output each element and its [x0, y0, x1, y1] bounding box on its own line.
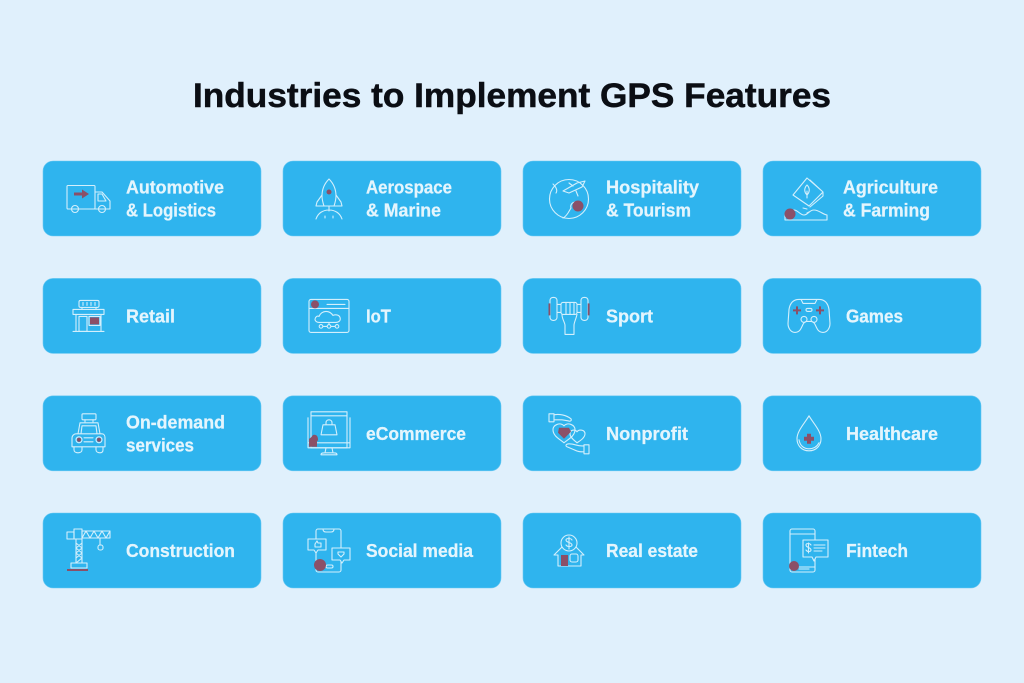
panel: Real estate — [523, 513, 741, 588]
panel: On-demand services — [43, 396, 261, 471]
panel: Aerospace & Marine — [283, 161, 501, 236]
panel: Automotive & Logistics — [43, 161, 261, 236]
icon: hand lifting dumbbell — [548, 297, 590, 334]
label: Agriculture — [843, 178, 938, 198]
label: Healthcare — [846, 424, 938, 444]
label: Retail — [126, 306, 175, 326]
panel: Social media — [283, 513, 501, 588]
label: Construction — [126, 541, 235, 561]
label — [843, 178, 938, 220]
label — [606, 178, 699, 220]
icon: house with coin — [554, 535, 584, 566]
label: On-demand — [126, 412, 225, 432]
label: IoT — [366, 306, 391, 326]
panel: Hospitality & Tourism — [523, 161, 741, 236]
label: Social media — [366, 541, 474, 561]
panel: Construction — [43, 513, 261, 588]
icon: delivery truck — [67, 186, 110, 212]
panel: Nonprofit — [523, 396, 741, 471]
panel: Sport — [523, 278, 741, 353]
title: Industries to Implement GPS Features — [193, 77, 831, 115]
label: & Logistics — [126, 200, 216, 220]
panel: Retail — [43, 278, 261, 353]
panel: IoT — [283, 278, 501, 353]
label: eCommerce — [366, 424, 466, 444]
label: services — [126, 435, 194, 455]
icon: phone with payment message — [789, 529, 828, 572]
label: Hospitality — [606, 178, 699, 198]
label — [126, 178, 224, 220]
panel: eCommerce — [283, 396, 501, 471]
panel: Fintech — [763, 513, 981, 588]
icon: seed packet and soil — [784, 178, 827, 220]
label: Nonprofit — [606, 424, 688, 444]
icon: tower crane — [67, 529, 110, 571]
label — [126, 412, 225, 455]
label — [366, 178, 452, 220]
panel: Games — [763, 278, 981, 353]
icon: monitor with shopping bag — [308, 412, 350, 455]
panel: Agriculture & Farming — [763, 161, 981, 236]
label: Aerospace — [366, 178, 452, 198]
icon: rocket — [316, 179, 342, 219]
label: Sport — [606, 306, 653, 326]
label: Games — [846, 306, 903, 326]
label: Real estate — [606, 541, 698, 561]
label: Automotive — [126, 178, 224, 198]
label: & Tourism — [606, 200, 691, 220]
icon: game controller — [788, 299, 830, 332]
icon: globe with plane — [550, 180, 588, 218]
icon: shop — [73, 300, 104, 331]
label: Fintech — [846, 541, 908, 561]
panel: Healthcare — [763, 396, 981, 471]
icon: taxi — [72, 414, 105, 453]
icon: drop with cross — [797, 416, 821, 451]
label: & Farming — [843, 200, 930, 220]
icon: phone with chat bubbles — [308, 529, 350, 572]
label: & Marine — [366, 200, 441, 220]
icon: hands and hearts — [549, 414, 589, 454]
icon: cloud browser window — [309, 299, 349, 332]
